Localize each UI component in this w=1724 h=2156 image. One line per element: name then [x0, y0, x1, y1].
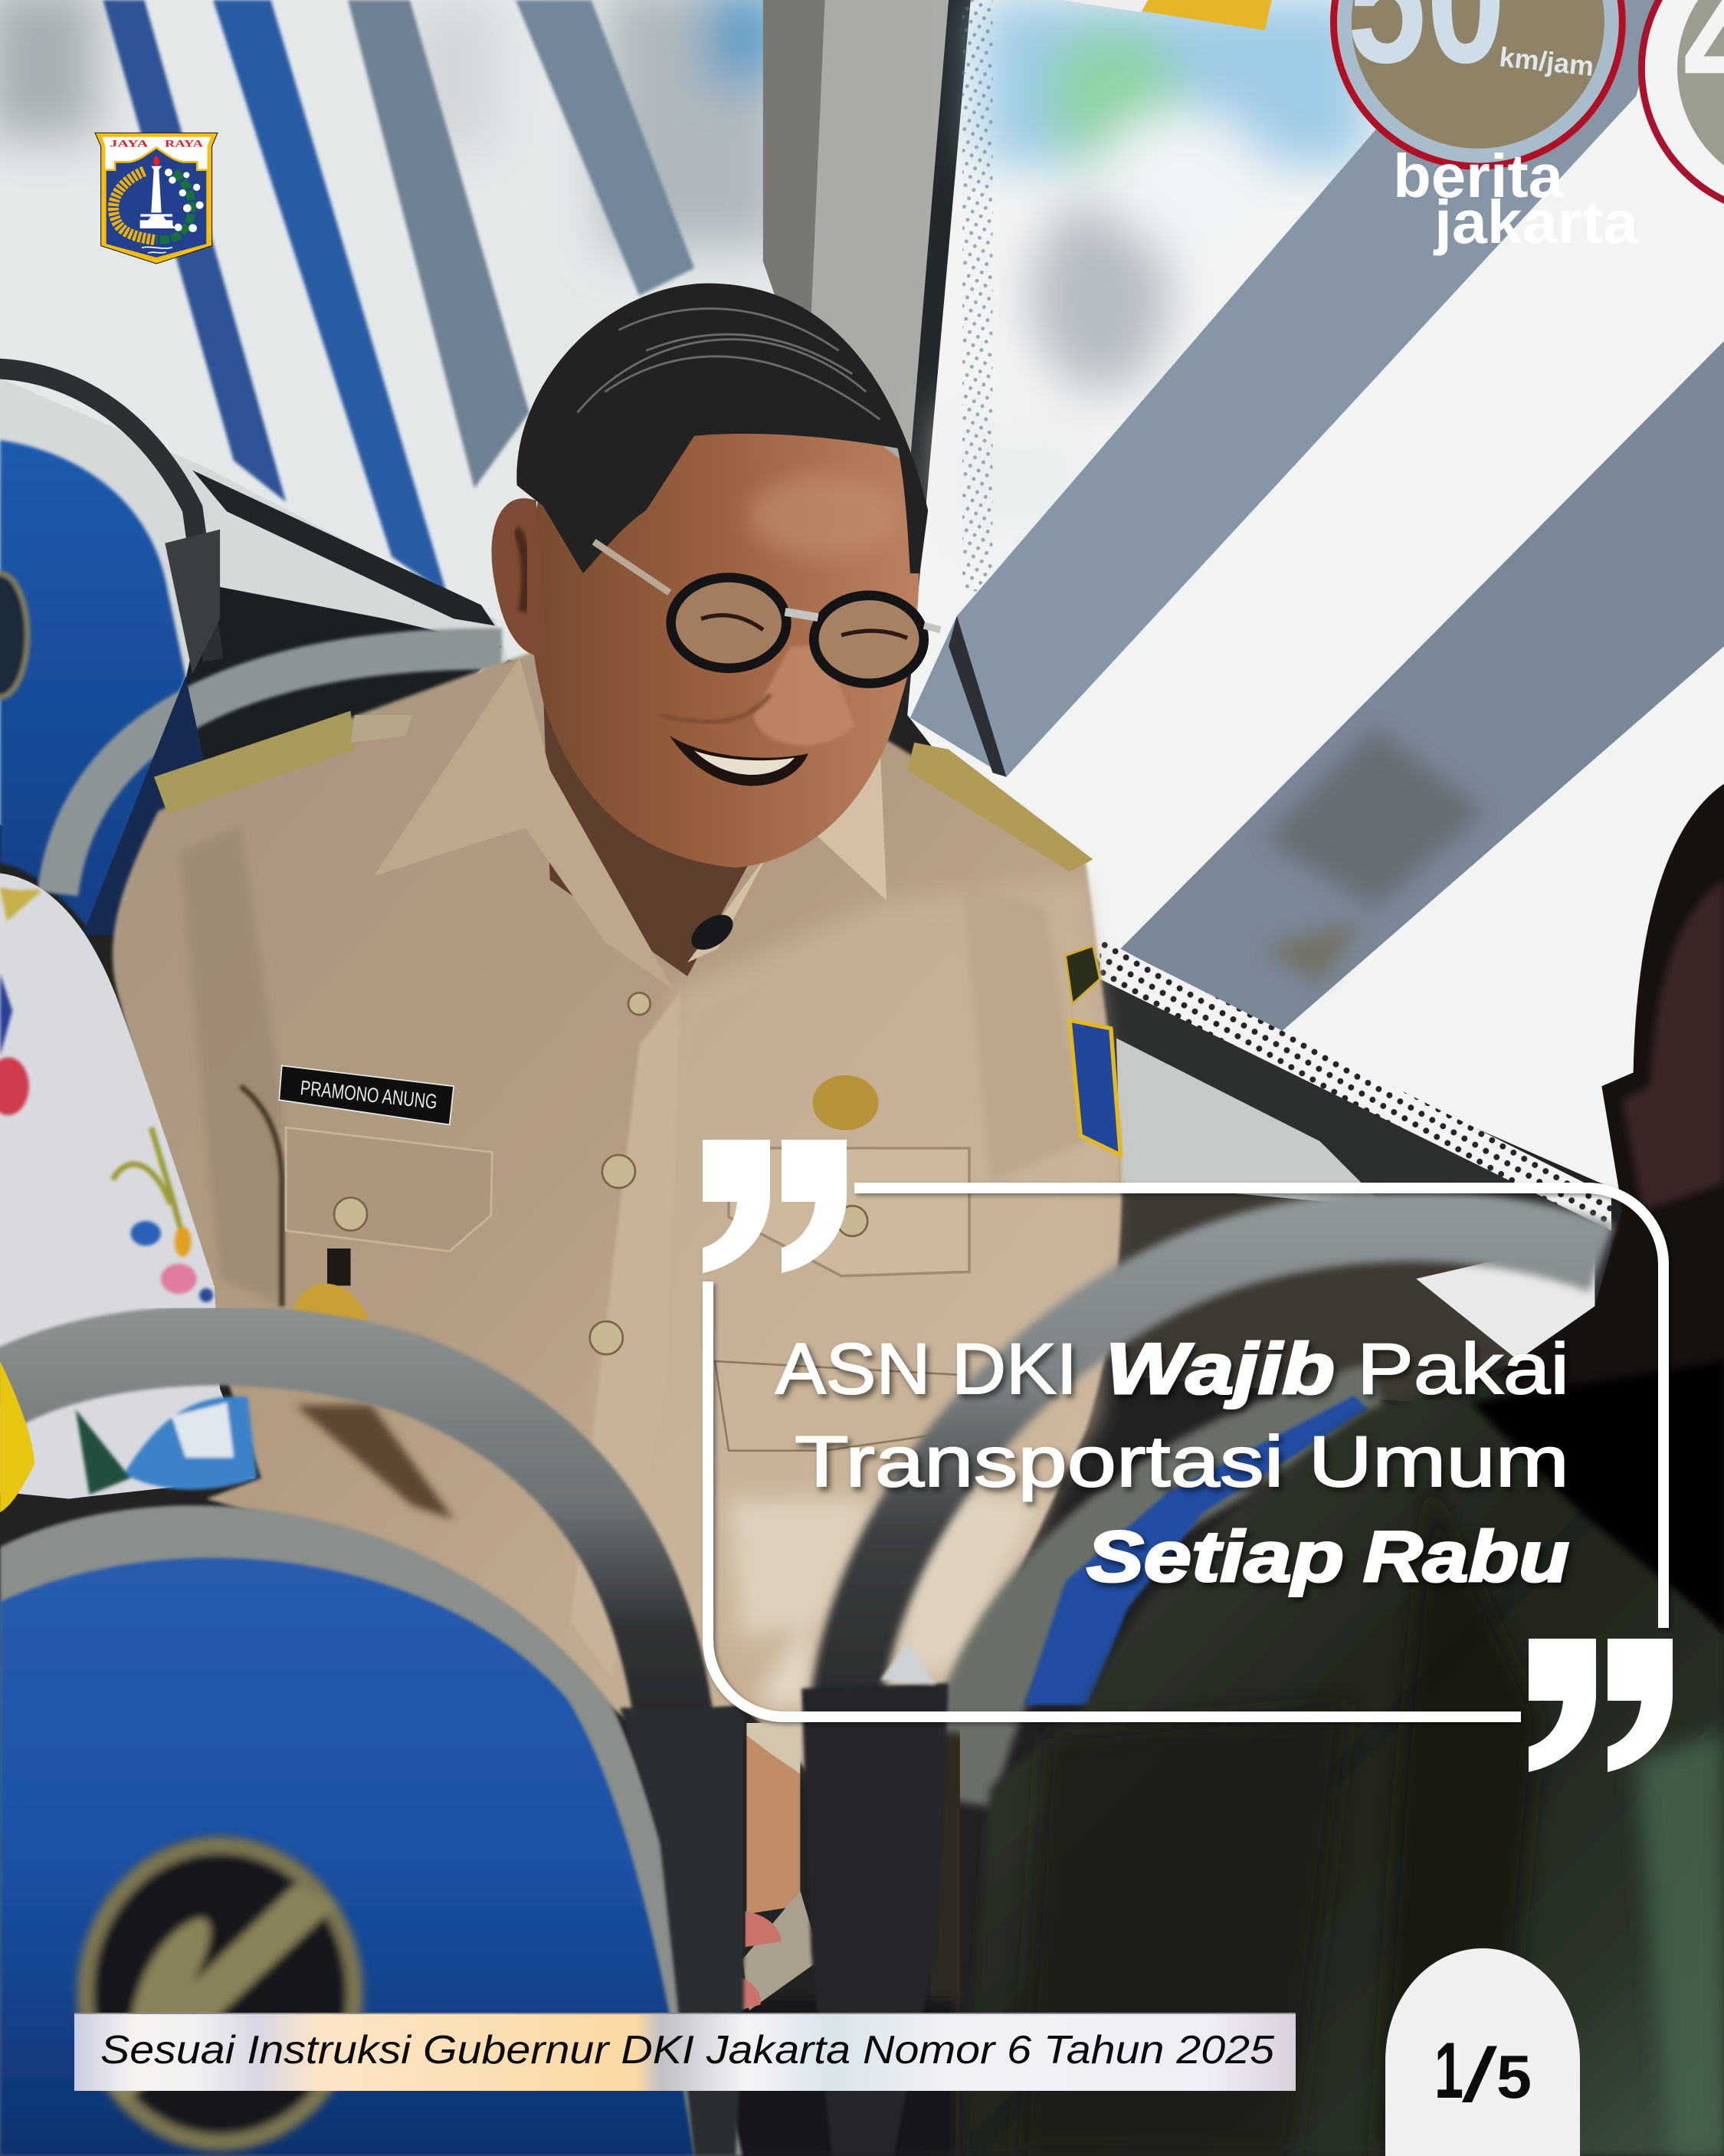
- water lines: [142, 247, 172, 253]
- title: ASN DKI Wajib Pakai Transportasi Umum Setiap Rabu: Pakai: [1357, 1328, 1569, 1409]
- speed limit sign: [1333, 0, 1622, 166]
- page indicator pill: [1385, 1948, 1580, 2156]
- batik flowers: [0, 887, 257, 1495]
- governor in khaki uniform: [113, 284, 1122, 1774]
- man in green jacket: [935, 1361, 1724, 2156]
- cotton branch: [156, 169, 204, 240]
- emblem: DKI Jakarta Jaya Raya crest: [95, 133, 218, 264]
- title: ASN DKI Wajib Pakai Transportasi Umum Setiap Rabu: Rabu: [1363, 1516, 1569, 1596]
- glasses: [594, 542, 940, 684]
- gold badge: [812, 1075, 879, 1131]
- hands and lower sleeve: [722, 1723, 955, 2156]
- seat side edge: [935, 1732, 955, 2156]
- seat logo: [77, 1836, 363, 2152]
- front left grab bar: [0, 1346, 674, 1718]
- nose: [753, 646, 855, 745]
- yellow pole: [0, 1361, 34, 1512]
- arm crease: [241, 1086, 282, 1306]
- page number 1/5: /: [1462, 2033, 1497, 2118]
- title: ASN DKI Wajib Pakai Transportasi Umum Setiap Rabu: [775, 1328, 1569, 1596]
- right epaulette: [907, 743, 1093, 871]
- title: ASN DKI Wajib Pakai Transportasi Umum Setiap Rabu: Setiap: [1087, 1516, 1344, 1596]
- jacket folds: [1018, 1485, 1724, 2156]
- far seat logo: [0, 573, 28, 697]
- shirt buttons: [334, 993, 867, 1354]
- forehead highlight: [749, 474, 900, 557]
- logo: berita jakarta: jakarta: [1433, 188, 1639, 256]
- name tag: PRAMONO ANUNG: [300, 1076, 438, 1114]
- shirt folds: [179, 825, 1086, 1519]
- sleeve patch: [1066, 946, 1120, 1155]
- right chest pocket: [729, 1148, 969, 1276]
- crest motto: JAYA: [110, 139, 149, 149]
- logo: berita jakarta: berita: [1393, 142, 1564, 210]
- window sill and dotted frame: [1100, 939, 1611, 1403]
- page number 1/5: 5: [1496, 2043, 1532, 2111]
- far seat handle: [57, 649, 502, 894]
- logo: berita jakarta: [1393, 142, 1639, 256]
- title: ASN DKI Wajib Pakai Transportasi Umum Setiap Rabu: ASN DKI: [775, 1328, 1077, 1409]
- page number 1/5: [1434, 2026, 1532, 2118]
- far seat back: [0, 440, 185, 935]
- lapel microphone: [685, 907, 739, 957]
- uniform body: [113, 646, 1122, 1774]
- window pillar: [763, 0, 973, 729]
- name tag: [279, 1065, 454, 1124]
- far bus interior, left side: [0, 369, 509, 935]
- near-right seat clip: [801, 1643, 949, 2156]
- diagonal window sticker bands: [910, 0, 1663, 777]
- reflection of epaulette: [1265, 729, 1485, 983]
- cream shirt tail: [729, 1485, 1045, 1705]
- quote frame: [708, 1188, 1663, 1717]
- title: ASN DKI Wajib Pakai Transportasi Umum Setiap Rabu: Transportasi Umum: [795, 1421, 1569, 1501]
- icon: closing quotation mark: [1529, 1639, 1673, 1772]
- cheek crease: [660, 694, 770, 722]
- shirt front light side: [592, 880, 1116, 1774]
- speed limit sign: km/jam: [1498, 41, 1595, 82]
- neck: [543, 687, 770, 976]
- front blue seat: [0, 1505, 742, 2156]
- left bus window with road view: [0, 0, 784, 660]
- front seat clip: [620, 1708, 744, 2156]
- seated woman's batik blouse: [0, 873, 257, 1498]
- caption text: Sesuai Instruksi Gubernur DKI Jakarta Nomor 6 Tahun 2025: [100, 2028, 1275, 2072]
- right collar: [687, 743, 887, 963]
- monument: [140, 156, 175, 228]
- left collar: [374, 658, 674, 990]
- caption bar: instruction source: [74, 2013, 1296, 2091]
- title: ASN DKI Wajib Pakai Transportasi Umum Setiap Rabu: Wajib: [1106, 1328, 1335, 1409]
- lower right pocket: [715, 1361, 969, 1451]
- icon: opening quotation mark: [703, 1140, 847, 1273]
- right person head and mask: [1457, 784, 1724, 1636]
- yellow notice tag: [1061, 0, 1272, 30]
- emblem: DKI Jakarta Jaya Raya crest: RAYA: [165, 139, 204, 149]
- gold ornament: [291, 1249, 369, 1320]
- rice wreath: [113, 171, 156, 240]
- left chest pocket: [286, 1127, 492, 1252]
- button placket: [571, 993, 680, 1678]
- hand: [746, 1723, 800, 1914]
- right bus window: [907, 0, 1724, 1238]
- head: [492, 284, 940, 868]
- sleeve cuff: [742, 1891, 821, 2010]
- near-right seat grab bar: [845, 1226, 1601, 1705]
- ear: [492, 498, 547, 656]
- page number 1/5: 1: [1434, 2026, 1463, 2115]
- hair: [516, 284, 928, 573]
- smile with teeth: [670, 736, 808, 786]
- near-right seat back: [955, 1396, 1381, 1801]
- fingers: [746, 1912, 781, 1947]
- second speed sign: [1641, 0, 1724, 215]
- left epaulette: [154, 710, 412, 814]
